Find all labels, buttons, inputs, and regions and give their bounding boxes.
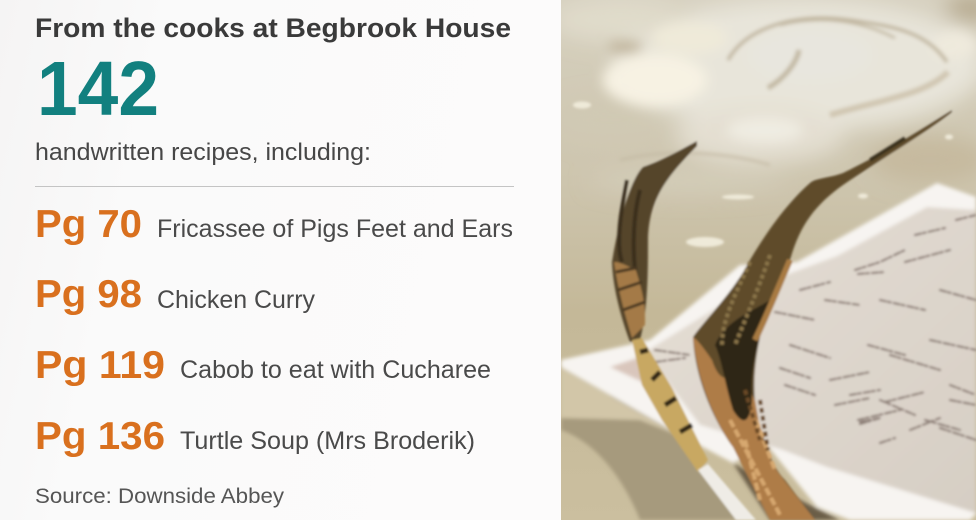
icon: right pheasant feather [693,110,952,520]
source: Source: Downside Abbey [35,484,284,508]
panel: text background [0,0,561,520]
text: handwritten recipes: handwritten recipes, including: [35,139,371,166]
recipe row: page 70 [35,203,513,246]
recipe row: page 70: Fricassee of Pigs Feet and Ears [157,215,513,243]
recipe row: page 119: Cabob to eat with Cucharee [180,356,491,384]
recipe row: page 119 [35,344,491,387]
recipe row: page 98: Pg 98 [35,273,142,316]
recipe paper white edge [561,183,976,520]
photo: feathers and handwritten recipe on a floured table [550,0,976,520]
divider [35,186,514,187]
recipe row: page 119: Pg 119 [35,344,165,387]
big number: 142: 142 [37,46,159,132]
recipe row: page 136 [35,415,475,458]
recipe paper sheet [645,207,976,513]
recipe row: page 136: Pg 136 [35,415,165,458]
recipe row: page 136: Turtle Soup (Mrs Broderik) [180,427,475,455]
recipe row: page 70: Pg 70 [35,203,142,246]
recipe row: page 98: Chicken Curry [157,286,315,314]
handwriting strokes [655,215,976,443]
flour swirl marks [690,14,950,166]
recipe row: page 98 [35,273,315,316]
table shadow [561,417,736,520]
heading: From the cooks at Begbrook House [35,13,511,43]
icon: left pheasant feather [612,141,756,520]
flour crumbs [573,102,953,247]
